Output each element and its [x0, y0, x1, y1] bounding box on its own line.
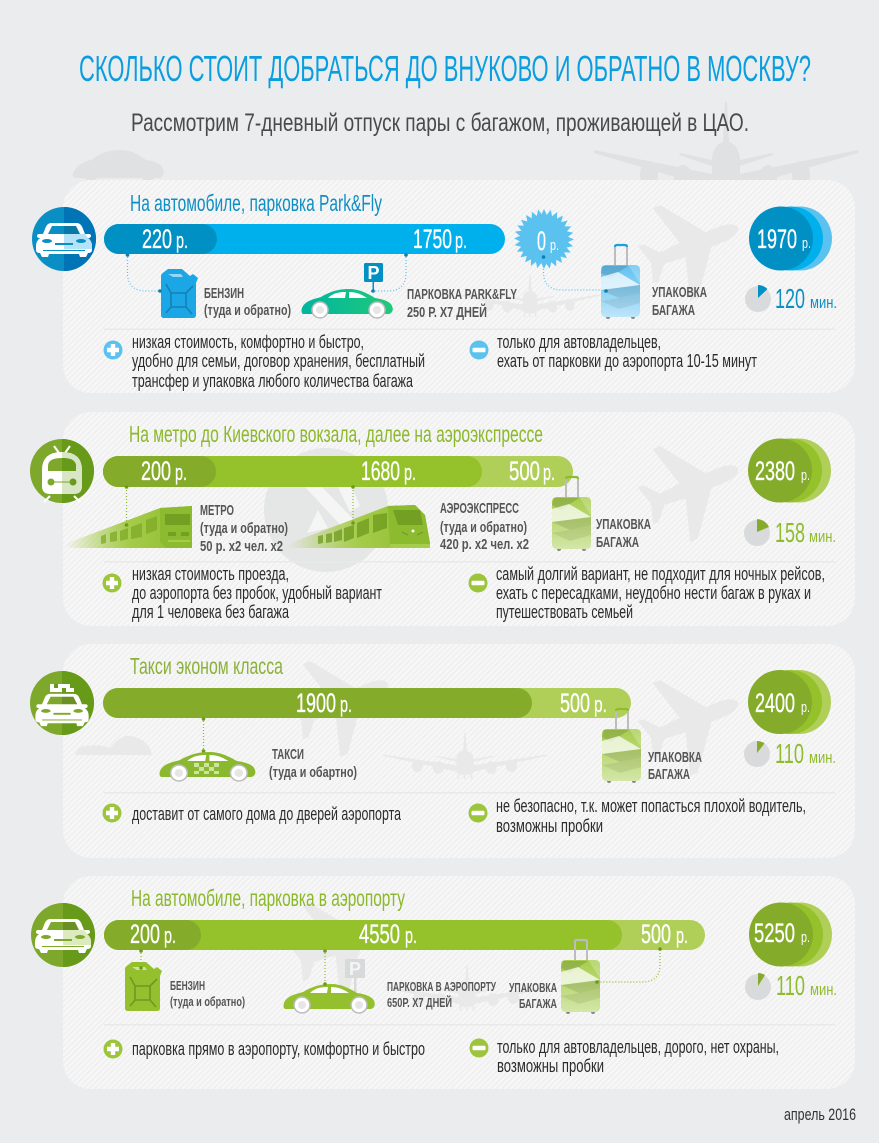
- cons: ехать от парковки до аэропорта 10-15 минут: [497, 351, 757, 371]
- connector dots: [139, 947, 662, 986]
- label: aeroexpress: АЭРОЭКСПРЕСС: [440, 500, 519, 517]
- connector: [202, 717, 205, 753]
- total cost: 5250: [754, 918, 795, 948]
- total cost: р.: [801, 929, 810, 946]
- icon: suitcase: [561, 940, 600, 1014]
- star: 0 rub: р.: [550, 237, 559, 254]
- connectors: [126, 487, 353, 525]
- label: metro: [200, 502, 288, 555]
- pros: [102, 564, 382, 622]
- cost bar: 220: [142, 224, 172, 254]
- icon: taxi car: [160, 752, 255, 781]
- cons: [470, 1037, 779, 1076]
- cons: путешествовать семьей: [496, 602, 633, 622]
- total cost: [749, 902, 832, 966]
- cost bar: р.: [164, 923, 176, 948]
- icon: suitcase: [552, 477, 591, 551]
- label: packing: [509, 981, 557, 1011]
- pros: для 1 человека без багажа: [132, 602, 290, 622]
- icon: train: [30, 439, 94, 503]
- time pie: [745, 973, 771, 1000]
- time value: 110: [776, 970, 805, 1001]
- time value: мин.: [810, 980, 837, 999]
- time pie: [744, 741, 770, 767]
- cost bar: 4550: [359, 919, 400, 949]
- time value: мин.: [810, 293, 837, 312]
- pros: парковка прямо в аэропорту, комфортно и быстро: [132, 1039, 425, 1059]
- star: 0 rub: 0: [537, 226, 546, 256]
- cost bar: 500: [560, 688, 590, 718]
- icon: parking sign: P: [349, 959, 361, 979]
- label: parking: [387, 980, 496, 1010]
- icon: parking sign: [364, 263, 383, 291]
- panel: park and fly: [32, 180, 855, 393]
- cost bar: 1680: [361, 456, 400, 486]
- icon: suitcase: [602, 709, 641, 783]
- cost bar: р.: [175, 460, 187, 485]
- icon: fuel can: [161, 269, 198, 318]
- pros: трансфер и упаковка любого количества багажа: [132, 371, 414, 391]
- label: fuel: БЕНЗИН: [170, 979, 205, 993]
- panel: airport parking: [31, 876, 855, 1089]
- pros: до аэропорта без пробок, удобный вариант: [132, 583, 382, 603]
- cons: возможны пробки: [496, 816, 603, 836]
- cost bar: 200: [130, 919, 160, 949]
- label: packing: [596, 516, 651, 551]
- cost bar: р.: [340, 692, 352, 717]
- label: parking: 250 Р. Х7 ДНЕЙ: [407, 303, 487, 321]
- connectors: [128, 254, 606, 291]
- icon: car: [31, 903, 95, 967]
- pros: низкая стоимость, комфортно и быстро,: [132, 332, 364, 352]
- total cost: 2380: [755, 456, 795, 486]
- icon: suitcase: [601, 245, 640, 319]
- heading: На автомобиле, парковка Park&Fly: [130, 190, 382, 216]
- pros: [104, 1039, 425, 1059]
- background shapes: [75, 637, 757, 786]
- label: fuel: (туда и обратно): [170, 995, 245, 1009]
- background planes: [460, 181, 757, 317]
- label: packing: БАГАЖА: [652, 302, 695, 319]
- label: parking: [407, 286, 517, 321]
- label: parking: 650Р. Х7 ДНЕЙ: [387, 995, 452, 1010]
- label: packing: [652, 284, 707, 319]
- pros: доставит от самого дома до дверей аэропорта: [132, 804, 402, 824]
- time value: 120: [775, 283, 805, 314]
- cons: [468, 796, 806, 836]
- panel: metro and aeroexpress: [30, 412, 855, 626]
- cost bar: 1900: [296, 688, 336, 718]
- heading: На метро до Киевского вокзала, далее на аэроэкспрессе: [129, 421, 543, 447]
- cost bar: [103, 456, 573, 487]
- label: packing: БАГАЖА: [648, 766, 690, 783]
- cost bar: 500: [509, 456, 540, 486]
- label: parking: ПАРКОВКА PARK&FLY: [407, 286, 517, 303]
- label: metro: (туда и обратно): [200, 520, 288, 537]
- time value: мин.: [809, 748, 836, 767]
- label: packing: [648, 749, 702, 783]
- label: packing: УПАКОВКА: [596, 516, 651, 533]
- label: packing: БАГАЖА: [519, 997, 557, 1011]
- cons: [468, 564, 825, 622]
- cost bar: [103, 688, 631, 718]
- time value: 158: [775, 517, 805, 548]
- label: aeroexpress: (туда и обратно): [440, 519, 527, 536]
- label: metro: 50 р. х2 чел. х2: [200, 538, 283, 555]
- total cost: [748, 438, 831, 502]
- label: fuel: [204, 285, 291, 319]
- label: fuel: (туда и обратно): [204, 302, 291, 319]
- icon: metro train: [65, 506, 192, 548]
- label: taxi: ТАКСИ: [272, 746, 304, 763]
- cost bar: р.: [594, 692, 607, 717]
- background plane: [594, 102, 858, 204]
- heading: Такси эконом класса: [130, 653, 283, 679]
- label: parking: ПАРКОВКА В АЭРОПОРТУ: [387, 980, 496, 994]
- cons: [470, 332, 757, 371]
- star: 0 rub: [514, 209, 574, 269]
- background plane: [627, 422, 757, 552]
- cost bar: 500: [641, 919, 671, 949]
- pros: [102, 804, 402, 824]
- pros: низкая стоимость проезда,: [132, 564, 289, 584]
- cost bar: р.: [676, 923, 688, 948]
- icon: taxi: [30, 671, 94, 735]
- total cost: р.: [801, 467, 810, 484]
- time value: мин.: [809, 527, 836, 546]
- icon: aeroexpress train: [288, 505, 430, 548]
- time pie: [745, 285, 771, 312]
- cost bar: 1750: [413, 224, 452, 254]
- label: taxi: [269, 746, 357, 781]
- label: packing: УПАКОВКА: [509, 981, 557, 995]
- total cost: 1970: [757, 224, 797, 254]
- total cost: 2400: [755, 688, 795, 718]
- pros: удобно для семьи, договор хранения, бесплатный: [132, 351, 425, 371]
- icon: green car: [284, 984, 375, 1013]
- time value: 110: [775, 738, 804, 769]
- cost bar: [104, 919, 705, 950]
- label: packing: УПАКОВКА: [652, 284, 707, 301]
- cost bar: 200: [141, 456, 171, 486]
- cost bar: р.: [176, 228, 188, 253]
- cost bar: р.: [543, 460, 555, 485]
- icon: green car: [302, 289, 393, 318]
- cost bar: [104, 224, 505, 254]
- label: fuel: БЕНЗИН: [204, 285, 244, 302]
- cost bar: р.: [405, 923, 417, 948]
- label: packing: БАГАЖА: [596, 534, 639, 551]
- label: taxi: (туда и обартно): [269, 764, 357, 781]
- label: aeroexpress: 420 р. х2 чел. х2: [440, 536, 529, 553]
- metro logo: [264, 448, 388, 572]
- total cost: [748, 670, 831, 734]
- icon: fuel can: [125, 962, 162, 1011]
- pros: [104, 332, 425, 391]
- cost bar: р.: [404, 460, 416, 485]
- total cost: [749, 206, 832, 270]
- total cost: р.: [801, 699, 810, 716]
- total cost: р.: [802, 235, 811, 252]
- icon: parking sign: P: [368, 263, 380, 283]
- label: metro: МЕТРО: [200, 502, 234, 519]
- cons: только для автовладельцев,: [497, 332, 661, 352]
- panel: taxi: [30, 637, 855, 858]
- icon: parking sign: [345, 959, 365, 1001]
- label: packing: УПАКОВКА: [648, 749, 702, 766]
- cons: возможны пробки: [497, 1056, 604, 1076]
- background car: [73, 150, 164, 181]
- connectors: [141, 950, 660, 984]
- time pie: [744, 519, 770, 546]
- icon: car: [32, 207, 96, 271]
- background planes: [277, 879, 549, 1011]
- connector dots: [126, 253, 608, 293]
- heading: На автомобиле, парковка в аэропорту: [131, 885, 405, 911]
- label: aeroexpress: [440, 500, 529, 553]
- label: fuel: [170, 979, 245, 1009]
- cost bar: р.: [455, 228, 467, 253]
